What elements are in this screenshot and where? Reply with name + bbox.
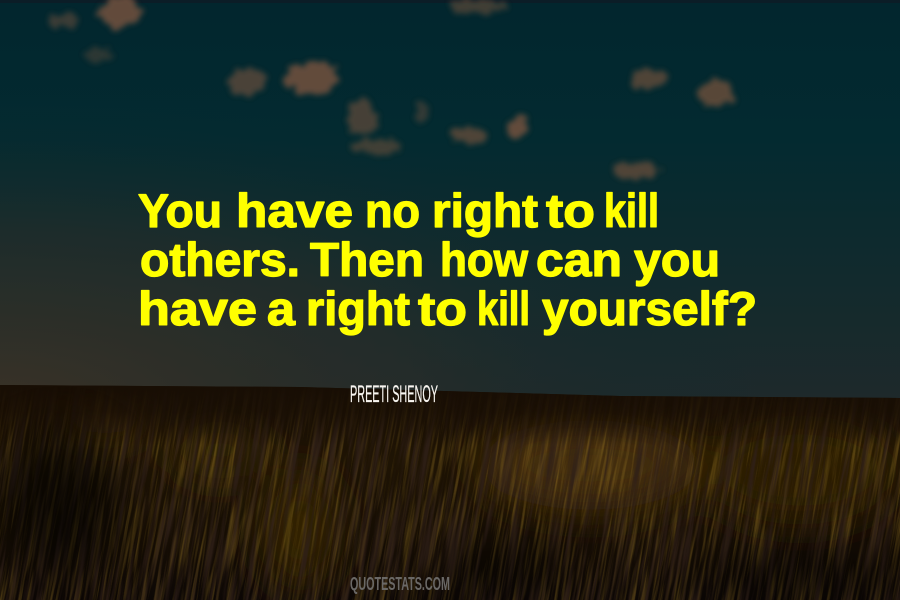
line 1: no — [365, 184, 420, 237]
line 2: others. — [140, 233, 300, 286]
line 2: Then — [310, 233, 424, 286]
line 1 — [138, 184, 659, 237]
line 2 — [140, 233, 720, 286]
line 3: a — [267, 282, 296, 335]
line 1: have — [236, 184, 353, 237]
grass blade texture — [0, 385, 900, 600]
line 2: how — [440, 233, 528, 286]
line 2: you — [634, 233, 720, 286]
line 3: right — [306, 282, 410, 335]
line 3: to — [418, 282, 467, 335]
warm patches of grass — [88, 416, 892, 597]
line 1: right — [432, 184, 538, 237]
grass field — [0, 385, 900, 600]
watermark: QUOTESTATS.COM — [350, 574, 450, 594]
shadow patches — [0, 430, 900, 595]
sky background — [0, 0, 900, 400]
line 2: can — [536, 233, 622, 286]
text: PREETI SHENOY — [350, 381, 438, 408]
line 3: yourself? — [542, 282, 757, 335]
quote text — [138, 184, 757, 335]
line 3: kill — [477, 282, 530, 335]
line 3: have — [138, 282, 257, 335]
line 1: kill — [604, 184, 659, 237]
line 1: You — [138, 184, 222, 237]
line 1: to — [546, 184, 595, 237]
line 3 — [138, 282, 757, 335]
clouds — [47, 0, 735, 179]
dark horizon band — [0, 385, 900, 445]
